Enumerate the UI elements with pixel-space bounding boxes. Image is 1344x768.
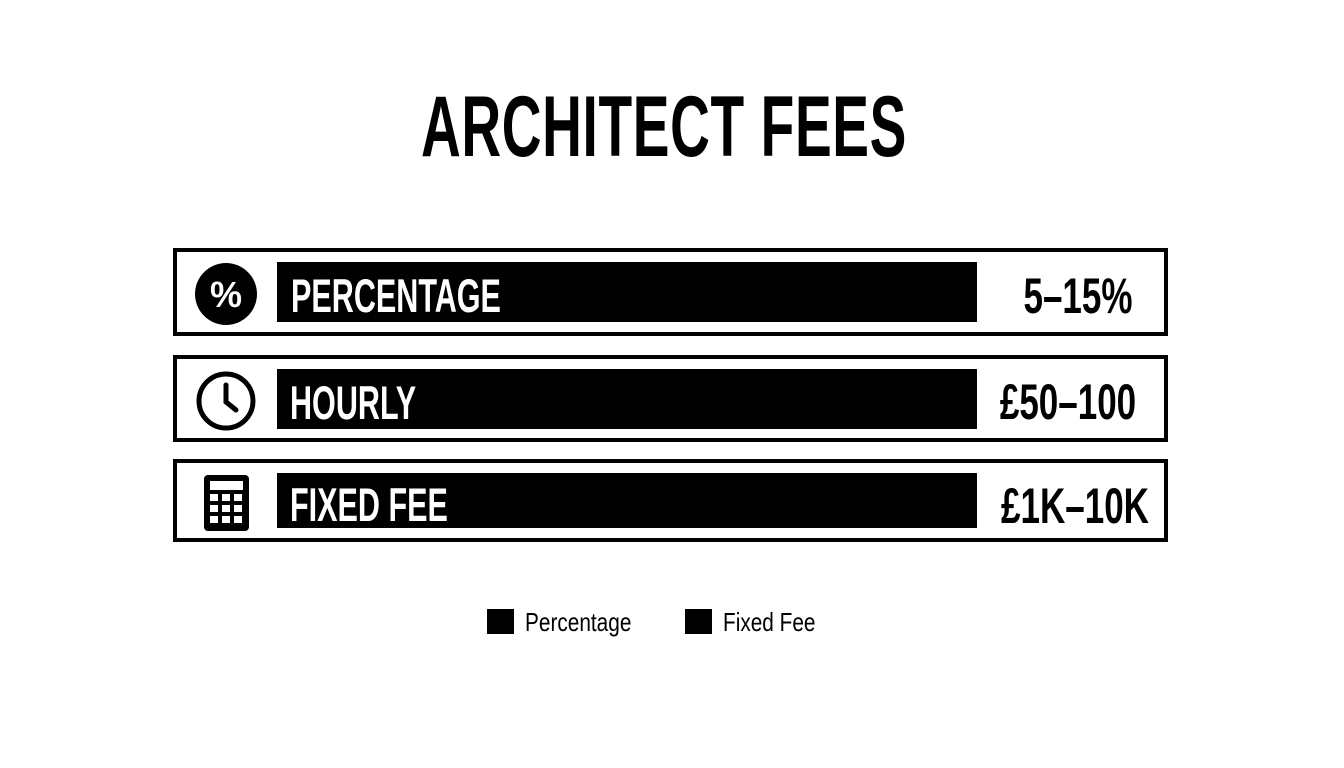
value: £50-100: £50–100 xyxy=(1000,374,1136,430)
icon: percent circle: % xyxy=(210,274,242,315)
label: percentage: PERCENTAGE xyxy=(291,269,501,322)
icon: clock xyxy=(196,372,256,430)
row: percentage xyxy=(173,248,1168,336)
legend item: percentage: Percentage xyxy=(525,607,631,637)
bar: percentage xyxy=(277,262,977,322)
bar: hourly xyxy=(277,369,977,429)
legend item: fixed fee: Fixed Fee xyxy=(723,607,815,637)
value: 5-15%: 5–15% xyxy=(1023,268,1132,324)
title: ARCHITECT FEES xyxy=(421,79,907,175)
label: hourly: HOURLY xyxy=(290,376,416,429)
value: £1K-10K: £1K–10K xyxy=(1001,478,1149,534)
label: fixed fee: FIXED FEE xyxy=(290,478,448,531)
icon: percent circle xyxy=(195,263,257,325)
legend xyxy=(487,607,815,637)
row: fixed fee xyxy=(173,459,1168,542)
bar: fixed fee xyxy=(277,473,977,528)
row: hourly xyxy=(173,355,1168,442)
icon: calculator xyxy=(204,475,249,531)
